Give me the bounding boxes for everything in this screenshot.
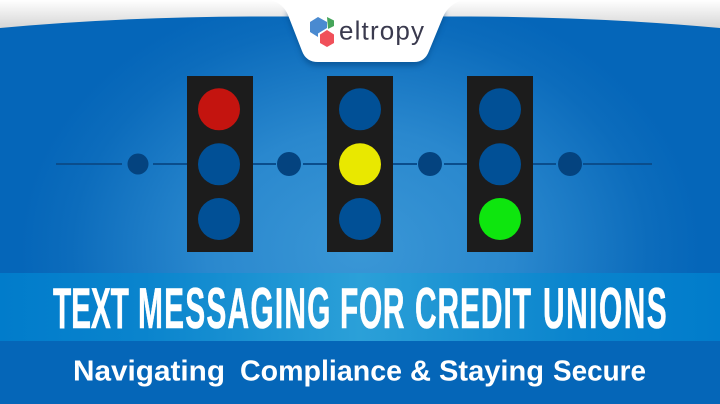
logo wordmark: eltropy: [339, 16, 424, 46]
title: UNIONS: [543, 277, 667, 341]
subtitle: Secure: [553, 356, 646, 388]
subtitle: [73, 356, 646, 388]
subtitle: Navigating: [73, 356, 225, 388]
title: [53, 277, 667, 341]
icon: blue hexagon: [310, 17, 327, 37]
connector line with dots: [56, 152, 652, 176]
title: CREDIT: [415, 277, 531, 341]
title band: [0, 273, 720, 341]
traffic light: green: [467, 76, 533, 252]
icon: green hexagon: [327, 17, 334, 29]
eltropy logo: [310, 16, 424, 49]
top white curved header: [0, 0, 720, 28]
title: MESSAGING: [138, 277, 330, 341]
subtitle: Staying: [439, 356, 544, 388]
subtitle: &: [410, 356, 431, 388]
title: FOR: [340, 277, 404, 341]
lower background strip: [0, 341, 720, 404]
title: TEXT: [53, 277, 129, 341]
icon: red hexagon: [320, 30, 334, 47]
traffic light: yellow: [327, 76, 393, 252]
subtitle: Compliance: [240, 356, 402, 388]
logo tab: [270, 0, 462, 62]
logo tab shadow: [286, 12, 446, 66]
icon: white gap behind red hexagon: [318, 28, 336, 49]
traffic light: red: [187, 76, 253, 252]
